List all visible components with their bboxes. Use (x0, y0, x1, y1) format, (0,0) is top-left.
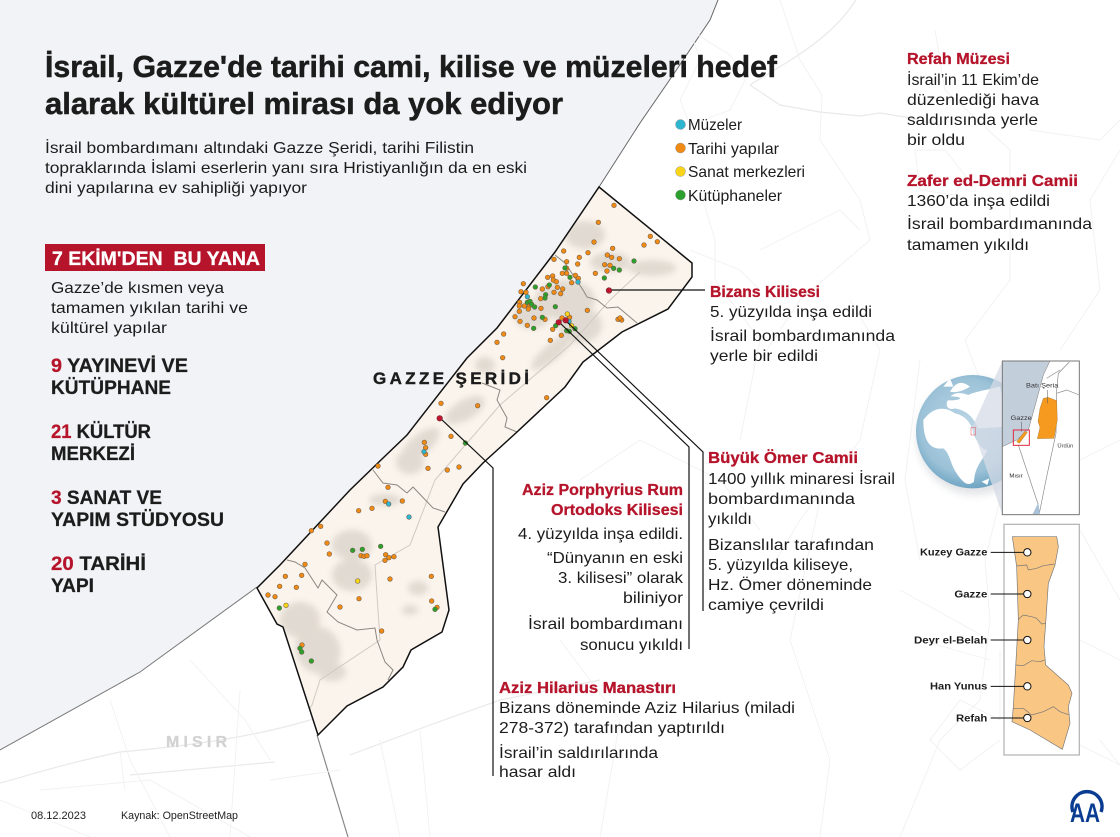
callout: Zafer ed-Demri Camii: tamamen yıkıldı (907, 237, 1029, 254)
district: Refah: Refah (956, 713, 987, 724)
callout: Aziz Porphyrius Rum Ortodoks Kilisesi: İsrail bombardımanı (528, 614, 683, 633)
map: Gazze Şeridi (257, 187, 692, 740)
title (45, 49, 778, 121)
stats list: MERKEZİ (51, 444, 135, 465)
callout: Refah Müzesi: düzenlediği hava (907, 92, 1039, 109)
district: Deyr el-Belah: Deyr el-Belah (914, 635, 987, 646)
callout: Zafer ed-Demri Camii: İsrail bombardımanında (907, 214, 1092, 233)
district: Kuzey Gazze: Kuzey Gazze (920, 548, 988, 559)
callout: Bizans Kilisesi: İsrail bombardımanında (710, 326, 895, 345)
district: Gazze (954, 589, 1031, 600)
footer: date: 08.12.2023 (31, 810, 86, 822)
callout: Büyük Ömer Camii: bombardımanında (708, 491, 855, 508)
locator: globe and regional inset: Mısır (1009, 474, 1023, 480)
stats list: YAPIM STÜDYOSU (51, 510, 224, 531)
highlighted sites (437, 288, 612, 421)
intro text: dini yapılarına ev sahipliği yapıyor (45, 180, 308, 197)
callout: Aziz Porphyrius Rum Ortodoks Kilisesi (518, 482, 684, 654)
callout: Aziz Hilarius Manastırı: hasar aldı (499, 764, 576, 781)
callout: Refah Müzesi: saldırısında yerle (907, 112, 1038, 129)
callout: Bizans Kilisesi: Bizans Kilisesi (710, 284, 820, 301)
district: Kuzey Gazze (920, 548, 1031, 559)
callout: Büyük Ömer Camii: 5. yüzyılda kiliseye, (708, 557, 853, 574)
stats list: YAPI (51, 576, 94, 597)
locator: globe and regional inset: Batı Şeria (1026, 383, 1059, 390)
callout: Büyük Ömer Camii: Hz. Ömer döneminde (708, 576, 872, 594)
callout: Büyük Ömer Camii: 1400 yıllık minaresi İsrail (708, 469, 895, 488)
district: Deyr el-Belah (914, 635, 1031, 646)
stats list: KÜTÜPHANE (51, 378, 171, 399)
footer: source: Kaynak: OpenStreetMap (121, 810, 238, 822)
callout: Bizans Kilisesi (710, 284, 895, 365)
icon: AA logo (1070, 792, 1102, 828)
district: Gazze: Gazze (954, 589, 988, 600)
locator: globe and regional inset: Ürdün (1057, 443, 1073, 450)
stats list: 21 KÜLTÜR (51, 422, 151, 443)
callout: Büyük Ömer Camii: camiye çevrildi (708, 597, 824, 614)
locator: globe and regional inset (916, 361, 1079, 515)
governorates inset map (914, 524, 1079, 755)
callout: Refah Müzesi: İsrail’in 11 Ekim’de (907, 70, 1039, 89)
callout: Aziz Hilarius Manastırı (499, 680, 795, 781)
callout: Aziz Hilarius Manastırı: Bizans döneminde Aziz Hilarius (miladi (499, 700, 795, 717)
stats list (51, 356, 224, 597)
stats list: 9 YAYINEVİ VE (51, 356, 188, 377)
callout: Büyük Ömer Camii (708, 448, 895, 614)
banner: 7 Ekim'den bu yana: 7 EKİM'DEN BU YANA (52, 249, 260, 270)
district: Han Yunus: Han Yunus (930, 682, 988, 693)
callout: Aziz Porphyrius Rum Ortodoks Kilisesi: Ortodoks Kilisesi (551, 502, 683, 519)
district: Refah (956, 713, 1031, 724)
intro text: İsrail bombardımanı altındaki Gazze Şeridi, tarihi Filistin (45, 138, 474, 157)
callout: Aziz Porphyrius Rum Ortodoks Kilisesi: “Dünyanın en eski (547, 550, 683, 567)
callout: Zafer ed-Demri Camii: Zafer ed-Demri Camii (907, 173, 1078, 190)
label: Gazze Şeridi: GAZZE ŞERİDİ (373, 369, 529, 388)
legend: Kütüphaneler (688, 188, 783, 205)
legend: Müzeler (688, 117, 743, 134)
callout: Refah Müzesi (907, 51, 1039, 149)
stats list: 3 SANAT VE (51, 488, 162, 509)
callout: Bizans Kilisesi: 5. yüzyılda inşa edildi (710, 304, 872, 321)
callout: Büyük Ömer Camii: yıkıldı (708, 511, 752, 528)
title: İsrail, Gazze'de tarihi cami, kilise ve müzeleri hedef (45, 49, 778, 84)
legend: Sanat merkezleri (688, 164, 805, 181)
stats list: 20 TARİHİ (51, 554, 146, 575)
callout: Aziz Porphyrius Rum Ortodoks Kilisesi: 3. kilisesi” olarak (558, 570, 684, 587)
callout: Büyük Ömer Camii: Büyük Ömer Camii (708, 448, 858, 467)
callout: Aziz Porphyrius Rum Ortodoks Kilisesi: Aziz Porphyrius Rum (522, 482, 683, 499)
intro text: topraklarında İslami eserlerin yanı sıra Hristiyanlığın da en eski (45, 158, 527, 177)
callout: Refah Müzesi: Refah Müzesi (907, 51, 1010, 68)
leader lines (440, 290, 705, 776)
legend (676, 117, 805, 205)
callout: Zafer ed-Demri Camii: 1360’da inşa edildi (907, 193, 1050, 210)
legend: Tarihi yapılar (688, 141, 780, 158)
callout: Zafer ed-Demri Camii (907, 173, 1092, 254)
intro text (45, 138, 527, 197)
callout: Büyük Ömer Camii: Bizanslılar tarafından (708, 537, 874, 554)
callout: Aziz Hilarius Manastırı: İsrail’in saldırılarında (499, 743, 658, 762)
stats intro text (51, 280, 248, 337)
callout: Aziz Porphyrius Rum Ortodoks Kilisesi: 4. yüzyılda inşa edildi. (518, 526, 683, 543)
callout: Bizans Kilisesi: yerle bir edildi (710, 348, 818, 365)
locator: globe and regional inset: Gazze (1011, 415, 1032, 422)
stats intro text: kültürel yapılar (51, 320, 168, 337)
callout: Aziz Porphyrius Rum Ortodoks Kilisesi: sonucu yıkıldı (580, 637, 683, 654)
stats intro text: Gazze’de kısmen veya (51, 280, 224, 297)
callout: Aziz Porphyrius Rum Ortodoks Kilisesi: biliniyor (623, 590, 684, 607)
callout: Aziz Hilarius Manastırı: Aziz Hilarius Manastırı (499, 680, 676, 697)
stats intro text: tamamen yıkılan tarihi ve (51, 300, 248, 317)
label: Mısır: MISIR (166, 734, 227, 751)
callout: Refah Müzesi: bir oldu (907, 132, 965, 149)
title: alarak kültürel mirası da yok ediyor (45, 86, 563, 121)
district: Han Yunus (930, 682, 1031, 693)
data points: northern strip (422, 203, 660, 457)
data points: southern strip (266, 464, 461, 663)
icon: AA logo: AA (1070, 798, 1100, 828)
callout: Aziz Hilarius Manastırı: 278-372) tarafından yaptırıldı (499, 720, 725, 737)
